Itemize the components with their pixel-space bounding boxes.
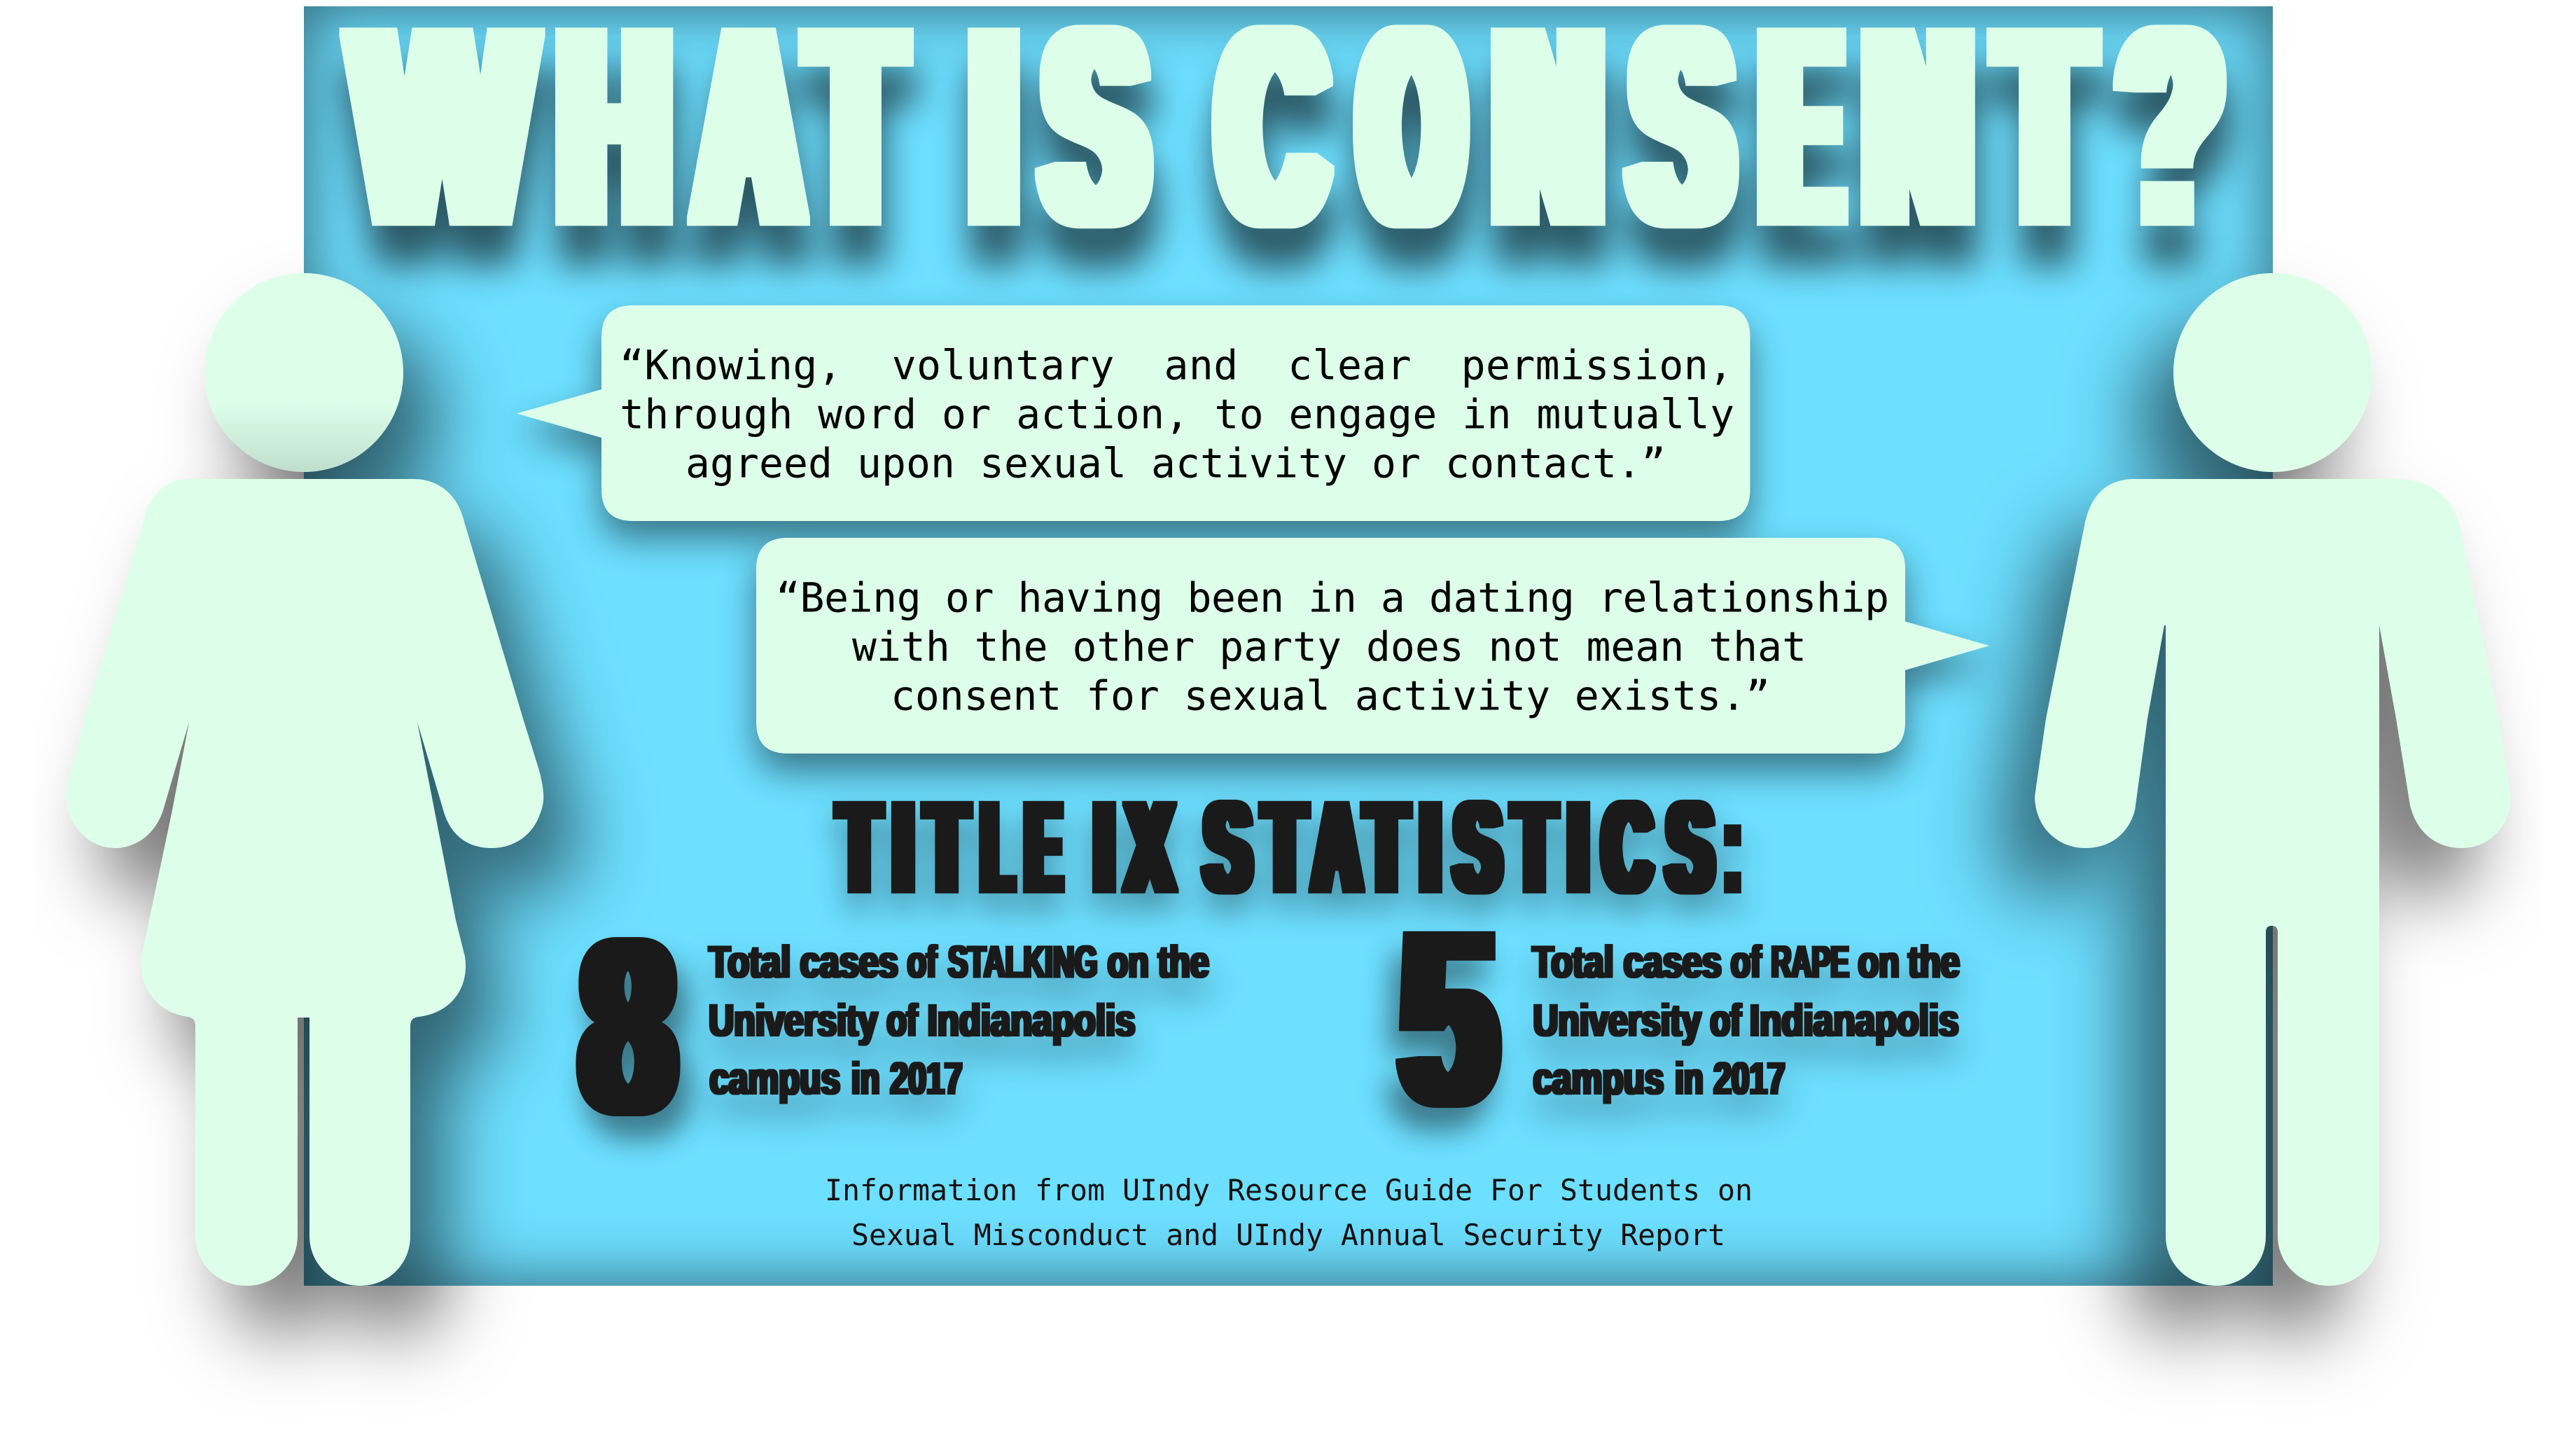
heading: Title IX statistics: I xyxy=(1421,775,1440,919)
statistic text: rape: cases xyxy=(1624,937,1722,987)
statistic text: stalking: in xyxy=(851,1053,879,1104)
title xyxy=(354,0,2221,280)
heading: Title IX statistics xyxy=(839,775,1736,919)
statistic text: rape: of xyxy=(1710,995,1741,1046)
head shading: woman xyxy=(204,273,403,472)
heading: Title IX statistics: S xyxy=(1667,775,1713,919)
heading: Title IX statistics: A xyxy=(1314,775,1360,919)
statistic text: stalking: of xyxy=(907,937,937,987)
statistic text: rape: RAPE xyxy=(1771,937,1849,987)
statistic text: rape: on xyxy=(1858,937,1900,987)
quote text 1: through word or action, to engage in mutually xyxy=(620,391,1734,438)
statistic text: stalking: 2017 xyxy=(890,1053,963,1104)
quote text 2 xyxy=(776,574,1889,720)
heading: Title IX statistics: I xyxy=(893,775,913,919)
statistic text: rape: the xyxy=(1908,937,1960,987)
statistic text: stalking: STALKING xyxy=(948,937,1098,987)
heading: Title IX statistics: T xyxy=(1264,775,1305,919)
statistic text: stalking: on xyxy=(1108,937,1149,987)
statistic text: stalking: Indianapolis xyxy=(928,995,1135,1046)
heading: Title IX statistics: S xyxy=(1455,775,1501,919)
statistic text: stalking xyxy=(709,937,1209,1104)
speech bubble 1 xyxy=(517,305,1750,521)
heading: Title IX statistics: I xyxy=(1094,775,1114,919)
figure: woman, left xyxy=(66,273,543,1286)
statistic text: rape: Total xyxy=(1532,937,1614,987)
statistic text: stalking: cases xyxy=(800,937,898,987)
statistic number: 5: 5 xyxy=(1402,880,1496,1156)
heading: Title IX statistics: C xyxy=(1603,775,1651,919)
body: woman in dress xyxy=(66,479,543,1286)
heading: Title IX statistics: I xyxy=(1568,775,1588,919)
heading: Title IX statistics: E xyxy=(1026,775,1060,919)
speech bubble 2 xyxy=(756,538,1989,754)
body: man xyxy=(2035,479,2511,1286)
heading: Title IX statistics: T xyxy=(926,775,968,919)
quote text 2: consent for sexual activity exists.” xyxy=(891,672,1770,720)
source note xyxy=(825,1173,1753,1252)
statistic text: rape: Indianapolis xyxy=(1750,995,1959,1046)
infographic artwork layer: : xyxy=(1729,775,1736,919)
statistic text: rape: of xyxy=(1731,937,1762,987)
statistic text: rape: in xyxy=(1675,1053,1704,1104)
bubble shape with pointer to the right xyxy=(756,538,1989,754)
statistic text: stalking: Total xyxy=(709,937,791,987)
heading: Title IX statistics: S xyxy=(1205,775,1251,919)
statistic text: stalking: of xyxy=(886,995,918,1046)
heading: Title IX statistics: X xyxy=(1127,775,1172,919)
heading: Title IX statistics: T xyxy=(839,775,880,919)
quote text 1: agreed upon sexual activity or contact.” xyxy=(685,440,1666,487)
statistic text: rape: campus xyxy=(1533,1053,1664,1104)
statistic text: stalking: campus xyxy=(710,1053,840,1104)
statistic text: rape: University xyxy=(1533,995,1701,1046)
panel: blue background xyxy=(304,6,2273,1286)
statistic text: stalking: University xyxy=(709,995,878,1046)
quote text 1 xyxy=(620,342,1734,487)
statistic text: rape: 2017 xyxy=(1713,1053,1785,1104)
quote text 2: with the other party does not mean that xyxy=(852,623,1806,671)
statistic text: rape xyxy=(1532,937,1960,1104)
figure: man, right xyxy=(2035,273,2511,1286)
statistic text: stalking: the xyxy=(1158,937,1209,987)
bubble shape with pointer to the left xyxy=(517,305,1750,521)
heading: Title IX statistics: L xyxy=(982,775,1012,919)
statistic number: 8: 8 xyxy=(582,888,674,1165)
quote text 2: “Being or having been in a dating relationship xyxy=(776,574,1889,622)
source note: Information from UIndy Resource Guide For Students on xyxy=(825,1173,1753,1207)
heading: Title IX statistics: T xyxy=(1514,775,1555,919)
head: woman xyxy=(204,273,403,472)
quote text 1: “Knowing, voluntary and clear permission, xyxy=(620,342,1733,389)
heading: Title IX statistics: T xyxy=(1366,775,1407,919)
head: man xyxy=(2173,273,2372,472)
source note: Sexual Misconduct and UIndy Annual Security Report xyxy=(851,1218,1725,1252)
